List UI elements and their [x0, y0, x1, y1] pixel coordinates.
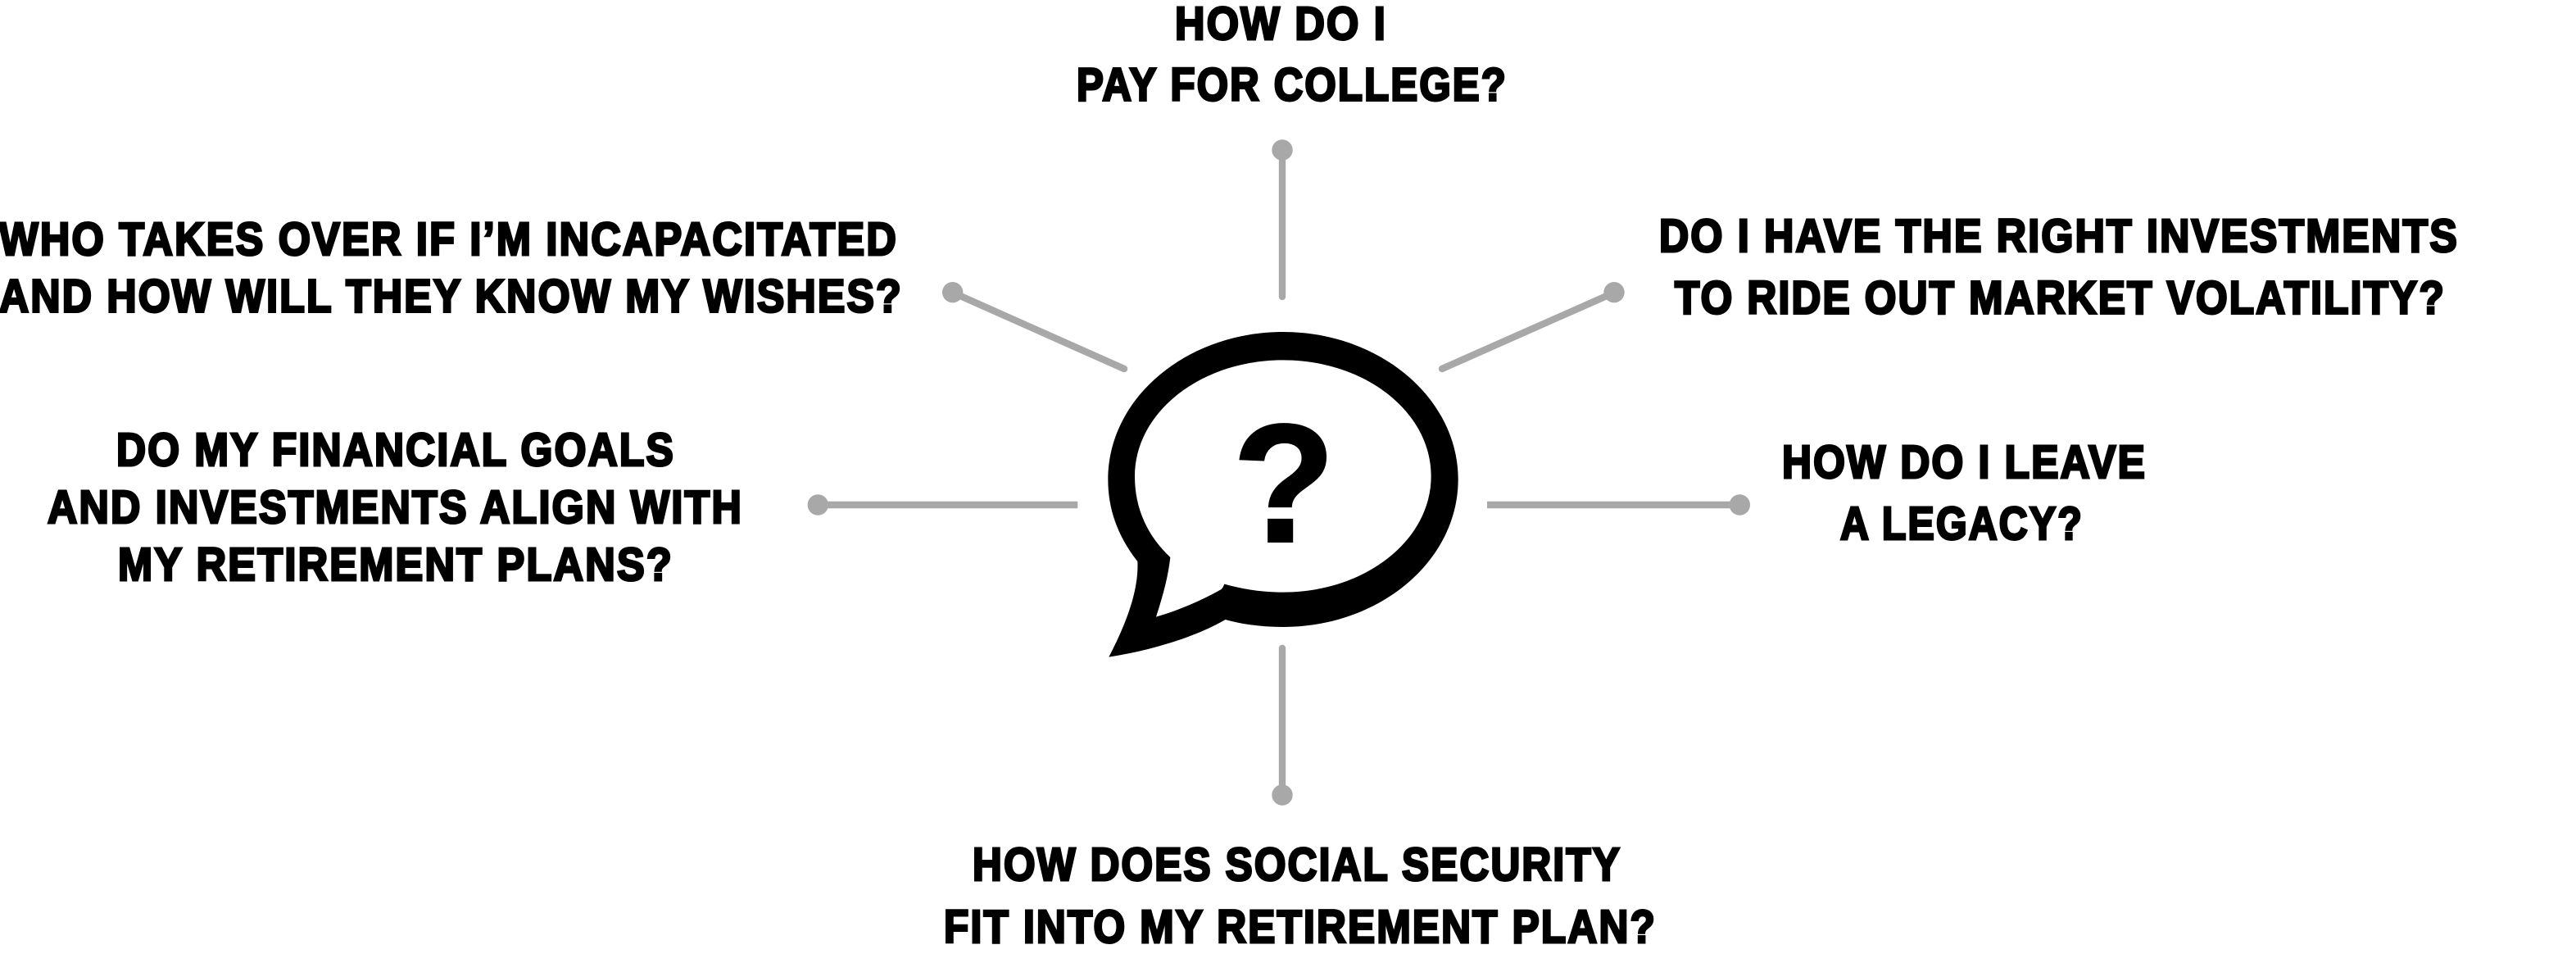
connector: right — [1487, 494, 1750, 516]
question: goals and retirement plans — [48, 424, 743, 591]
question: social security: HOW DOES SOCIAL SECURITY — [973, 838, 1621, 891]
connector: left — [808, 494, 1077, 516]
question: leaving a legacy: HOW DO I LEAVE — [1782, 436, 2147, 488]
connector: upper right — [1442, 282, 1625, 369]
connector: upper left — [942, 282, 1124, 369]
speech bubble outline — [1108, 332, 1458, 657]
question: incapacity and wishes: AND HOW WILL THEY KNOW MY WISHES? — [0, 270, 903, 323]
question: incapacity and wishes: WHO TAKES OVER IF I’M INCAPACITATED — [0, 213, 898, 266]
question mark glyph: ? — [1232, 389, 1336, 578]
question: social security — [944, 838, 1657, 953]
question: leaving a legacy: A LEGACY? — [1840, 497, 2084, 550]
question: social security: FIT INTO MY RETIREMENT PLAN? — [944, 901, 1657, 953]
question: incapacity and wishes — [0, 213, 903, 323]
connector: bottom — [1272, 648, 1293, 806]
question: investments and volatility — [1659, 210, 2459, 325]
question: goals and retirement plans: DO MY FINANCIAL GOALS — [116, 424, 675, 476]
question: paying for college — [1077, 0, 1508, 111]
connector: top — [1272, 139, 1293, 297]
question: leaving a legacy — [1782, 436, 2147, 550]
icon: speech bubble with question mark — [1108, 332, 1458, 657]
question: paying for college: PAY FOR COLLEGE? — [1077, 59, 1508, 111]
question: investments and volatility: TO RIDE OUT MARKET VOLATILITY? — [1675, 272, 2446, 325]
question: goals and retirement plans: MY RETIREMENT PLANS? — [118, 538, 673, 591]
question: goals and retirement plans: AND INVESTMENTS ALIGN WITH — [48, 481, 743, 534]
question: investments and volatility: DO I HAVE THE RIGHT INVESTMENTS — [1659, 210, 2459, 262]
